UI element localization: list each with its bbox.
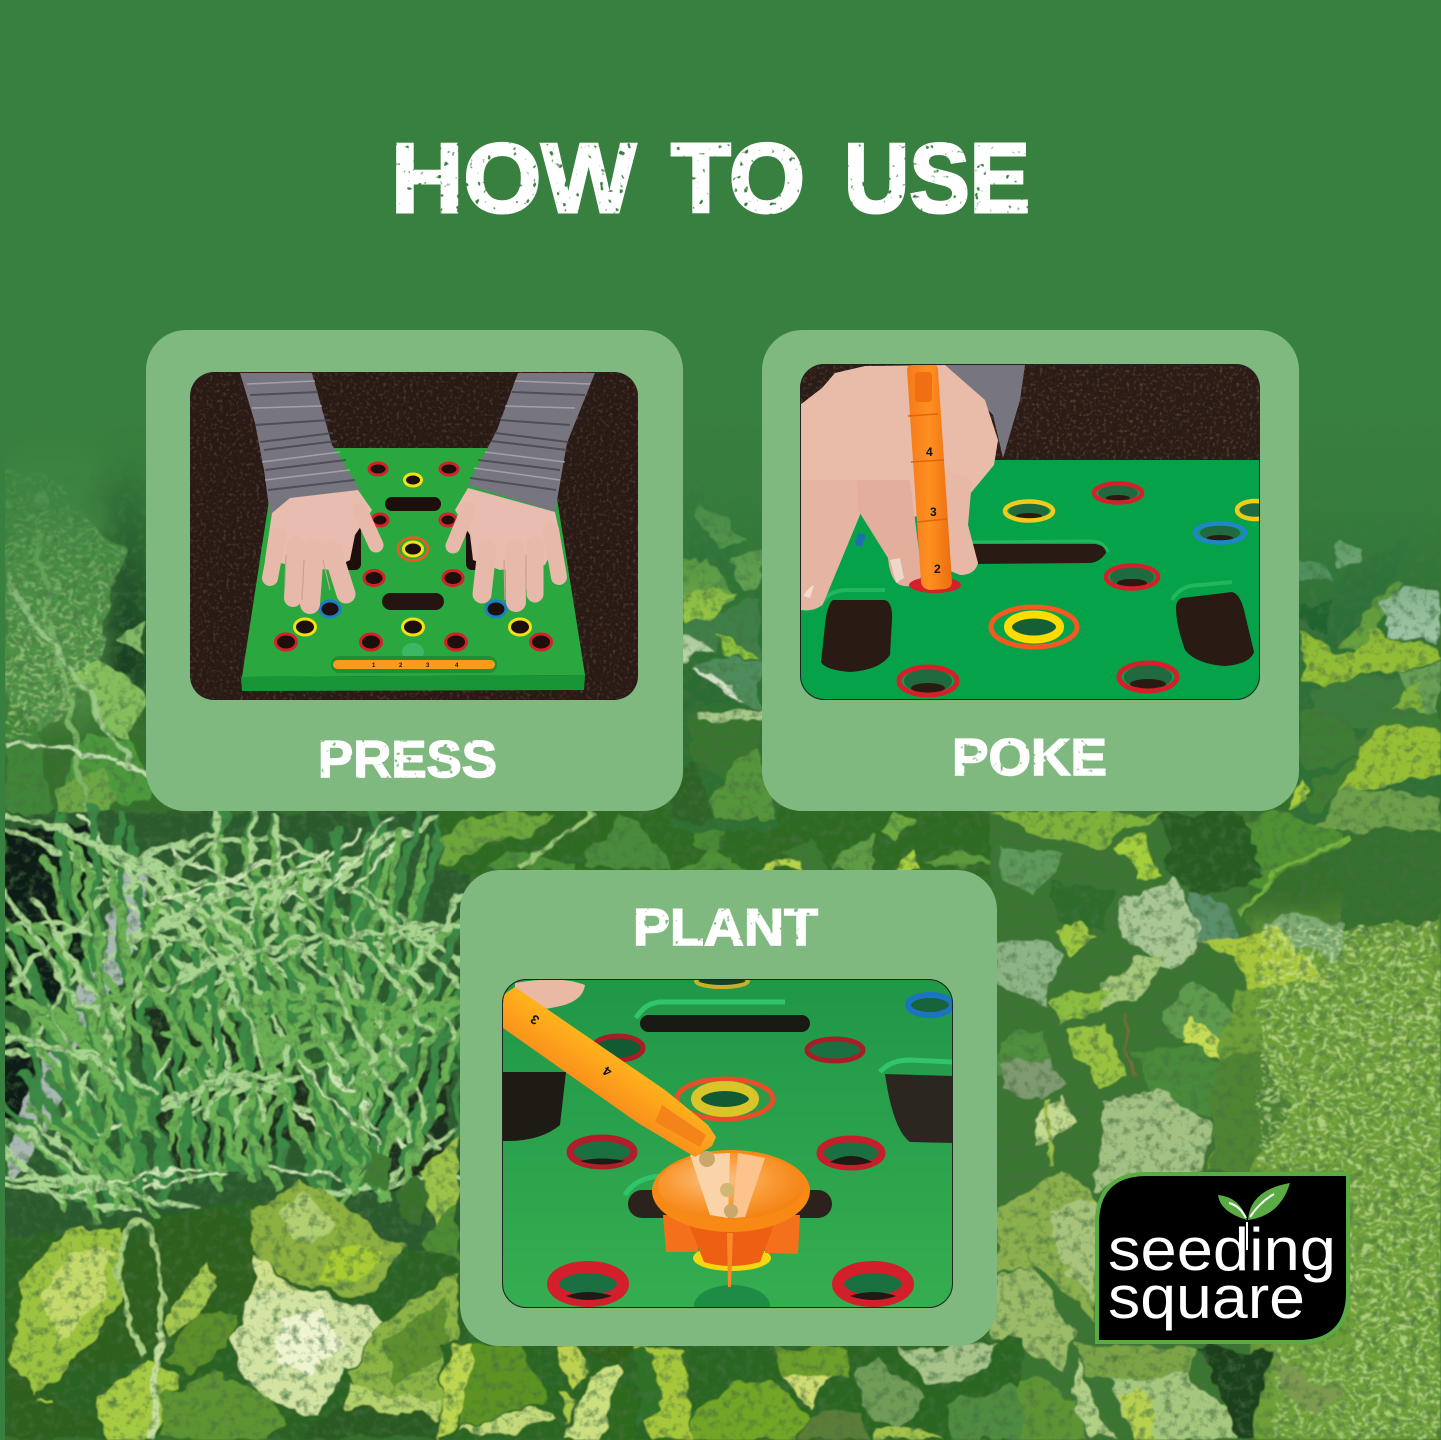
title: HOW: [391, 123, 637, 233]
logo: Seeding Square: square: [1108, 1264, 1305, 1331]
photo: hands pressing board: 1: [372, 663, 376, 669]
lettuce leaves lower left: [0, 1178, 470, 1440]
carrot tops and leaves upper left: [5, 470, 146, 820]
photo: pouring seeds into funnel: 4: [599, 1063, 614, 1080]
foliage under centre of panels: [440, 800, 1020, 875]
photo: pouring seeds into funnel: [502, 975, 953, 1327]
logo: Seeding Square: [1097, 1174, 1348, 1342]
photo: poking hole with orange stick: 2: [934, 562, 941, 576]
title: USE: [844, 123, 1030, 233]
photo: pouring seeds into funnel: 3: [528, 1012, 542, 1028]
small weeds right of grass: [365, 1135, 458, 1270]
foliage strip between top panels: [670, 430, 780, 830]
foliage mottling: [0, 470, 1441, 1440]
green fade overlay: [0, 0, 1441, 660]
photo: poking hole with orange stick: 4: [926, 445, 933, 459]
bean leaves right side: [990, 805, 1441, 1440]
icon: sprout: [1218, 1183, 1290, 1250]
photo: hands pressing board: [190, 372, 638, 700]
feathery carrot tops lower right: [1210, 920, 1441, 1440]
broad leaves upper right: [1290, 537, 1441, 850]
photo: hands pressing board: 3: [426, 663, 430, 669]
label: poke: POKE: [952, 729, 1107, 787]
panel: poke: [762, 330, 1299, 811]
title: [391, 123, 1030, 233]
soil under grass: [5, 811, 470, 1251]
label: plant: PLANT: [633, 899, 818, 957]
label: press: PRESS: [318, 731, 497, 789]
background: garden foliage fading into green: [5, 470, 1441, 1440]
title: TO: [671, 123, 805, 233]
photo: hands pressing board: 4: [455, 663, 459, 669]
photo: hands pressing board: 2: [399, 663, 403, 669]
panel: plant: [460, 870, 997, 1346]
panel: press: [146, 330, 683, 811]
spring onion grass blades: [0, 805, 486, 1220]
photo: poking hole with orange stick: 3: [930, 505, 937, 519]
bottom centre foliage: [440, 1340, 1020, 1440]
wordmark: seeding: [1108, 1216, 1336, 1283]
photo: poking hole with orange stick: [800, 364, 1273, 700]
